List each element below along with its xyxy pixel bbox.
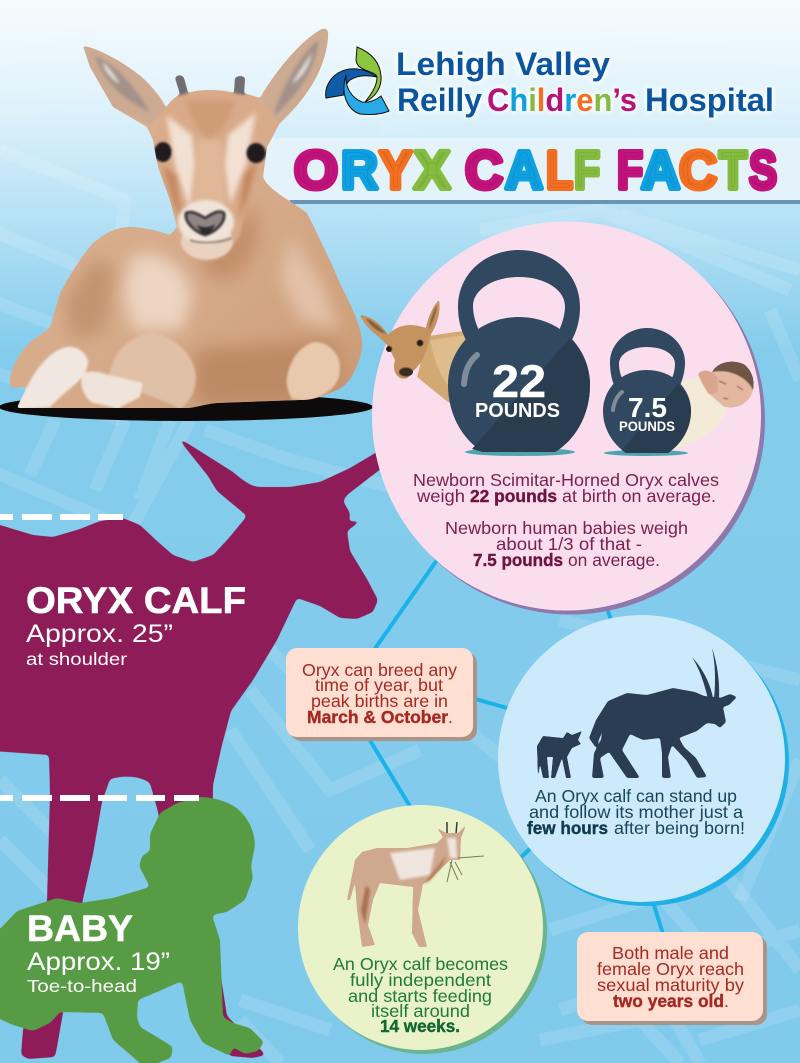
logo: Lehigh Valley Reilly Children's Hospital: Hospital xyxy=(645,82,774,118)
callout: sexual maturity xyxy=(577,932,767,1025)
ears xyxy=(83,29,328,125)
label: baby height: Approx. 19” xyxy=(27,948,170,976)
ground shadow xyxy=(0,393,373,421)
title: ORYX CALF FACTS: X xyxy=(414,140,450,200)
title banner xyxy=(262,138,800,204)
face xyxy=(155,89,268,255)
label: oryx calf height: at shoulder xyxy=(26,649,127,669)
icon: 7.5 pound kettlebell: POUNDS xyxy=(619,419,675,434)
text: weight facts: Newborn Scimitar-Horned Oryx calves xyxy=(413,470,719,490)
icon: 7.5 pound kettlebell xyxy=(603,328,691,456)
icon: 22 pound kettlebell xyxy=(448,250,590,456)
text: independence fact: and starts feeding xyxy=(348,986,492,1006)
logo: Lehigh Valley Reilly Children's Hospital: Reilly xyxy=(397,82,482,118)
icon: 22 pound kettlebell: POUNDS xyxy=(475,400,560,422)
baby silhouette xyxy=(0,797,264,1063)
text: weight facts: about 1/3 of that - xyxy=(496,534,642,554)
dashed height marker: baby xyxy=(0,795,199,801)
text: stand up fact xyxy=(527,786,745,838)
callout: sexual maturity: . xyxy=(724,991,729,1011)
callout: breeding: March & October xyxy=(307,707,448,727)
text: independence fact: An Oryx calf becomes xyxy=(333,954,508,974)
photo: newborn oryx calf xyxy=(360,300,470,410)
callout: breeding: Oryx can breed any xyxy=(302,660,457,680)
label: oryx calf height xyxy=(26,580,246,669)
panel: weight comparison xyxy=(360,222,765,614)
legs xyxy=(107,333,196,408)
photo: swaddled newborn baby xyxy=(675,362,754,449)
text: weight facts: weigh xyxy=(416,486,465,506)
title: ORYX CALF FACTS: S xyxy=(749,140,777,200)
title: ORYX CALF FACTS: F xyxy=(574,140,600,200)
callout: sexual maturity: Both male and xyxy=(612,943,729,963)
title: ORYX CALF FACTS: Y xyxy=(379,140,412,200)
title: ORYX CALF FACTS: T xyxy=(719,140,747,200)
label: baby height: Toe-to-head xyxy=(27,976,137,996)
title: ORYX CALF FACTS: C xyxy=(679,140,717,200)
callout: sexual maturity: two years old xyxy=(613,991,724,1011)
connector lines xyxy=(368,560,663,934)
panel: independence xyxy=(298,805,547,1054)
title: ORYX CALF FACTS: C xyxy=(465,140,503,200)
text: weight facts: on average. xyxy=(568,550,660,570)
title: ORYX CALF FACTS: A xyxy=(641,140,680,200)
photo: young oryx eating xyxy=(347,822,484,947)
panel: stand up after birth xyxy=(498,615,789,906)
title: ORYX CALF FACTS xyxy=(294,140,777,200)
title: ORYX CALF FACTS: R xyxy=(341,140,378,200)
icon: 22 pound kettlebell: 22 xyxy=(492,356,546,407)
title: ORYX CALF FACTS: O xyxy=(294,140,338,200)
label: baby height: BABY xyxy=(27,908,133,949)
callout: sexual maturity: female Oryx reach xyxy=(597,959,744,979)
text: independence fact: fully independent xyxy=(350,970,491,990)
text: weight facts: 22 pounds xyxy=(470,486,557,506)
callout: breeding: time of year, but xyxy=(315,675,443,695)
label: oryx calf height: Approx. 25” xyxy=(26,620,173,648)
label: oryx calf height: ORYX CALF xyxy=(26,580,246,621)
callout: sexual maturity: sexual maturity by xyxy=(597,975,744,995)
icon: calf silhouette xyxy=(537,731,582,778)
callout: breeding: peak births are in xyxy=(311,691,448,711)
title: ORYX CALF FACTS: F xyxy=(617,140,643,200)
callout: breeding: . xyxy=(448,707,453,727)
text: weight facts: at birth on average. xyxy=(562,486,716,506)
label: baby height xyxy=(27,908,170,996)
text: stand up fact: few hours xyxy=(527,818,608,838)
photo: resting oryx calf xyxy=(10,29,362,408)
text: independence fact xyxy=(333,954,508,1036)
text: independence fact: itself around xyxy=(371,1001,470,1021)
title: ORYX CALF FACTS: A xyxy=(505,140,543,200)
logo: Lehigh Valley Reilly Children's Hospital: Lehigh Valley xyxy=(396,46,610,82)
title: ORYX CALF FACTS: L xyxy=(546,140,573,200)
muzzle xyxy=(180,232,234,261)
dashed height marker: oryx calf xyxy=(0,514,123,520)
text: stand up fact: after being born! xyxy=(614,818,745,838)
text: weight facts xyxy=(413,470,719,570)
body shading xyxy=(65,205,345,405)
text: stand up fact: An Oryx calf can stand up xyxy=(535,786,737,806)
eyes xyxy=(154,142,172,162)
text: independence fact: 14 weeks. xyxy=(380,1016,460,1036)
oryx calf silhouette xyxy=(0,436,395,1059)
logo: Lehigh Valley Reilly Children's Hospital xyxy=(326,46,774,118)
text: weight facts: Newborn human babies weigh xyxy=(445,518,688,538)
text: weight facts: 7.5 pounds xyxy=(473,550,563,570)
logo: Lehigh Valley Reilly Children's Hospital: Children’s xyxy=(487,82,637,118)
text: stand up fact: and follow its mother just a xyxy=(529,802,743,822)
horns xyxy=(175,75,245,96)
icon: 7.5 pound kettlebell: 7.5 xyxy=(628,392,667,423)
logo mark xyxy=(326,47,389,115)
callout: breeding xyxy=(286,648,477,741)
icon: adult oryx silhouette xyxy=(589,648,737,778)
